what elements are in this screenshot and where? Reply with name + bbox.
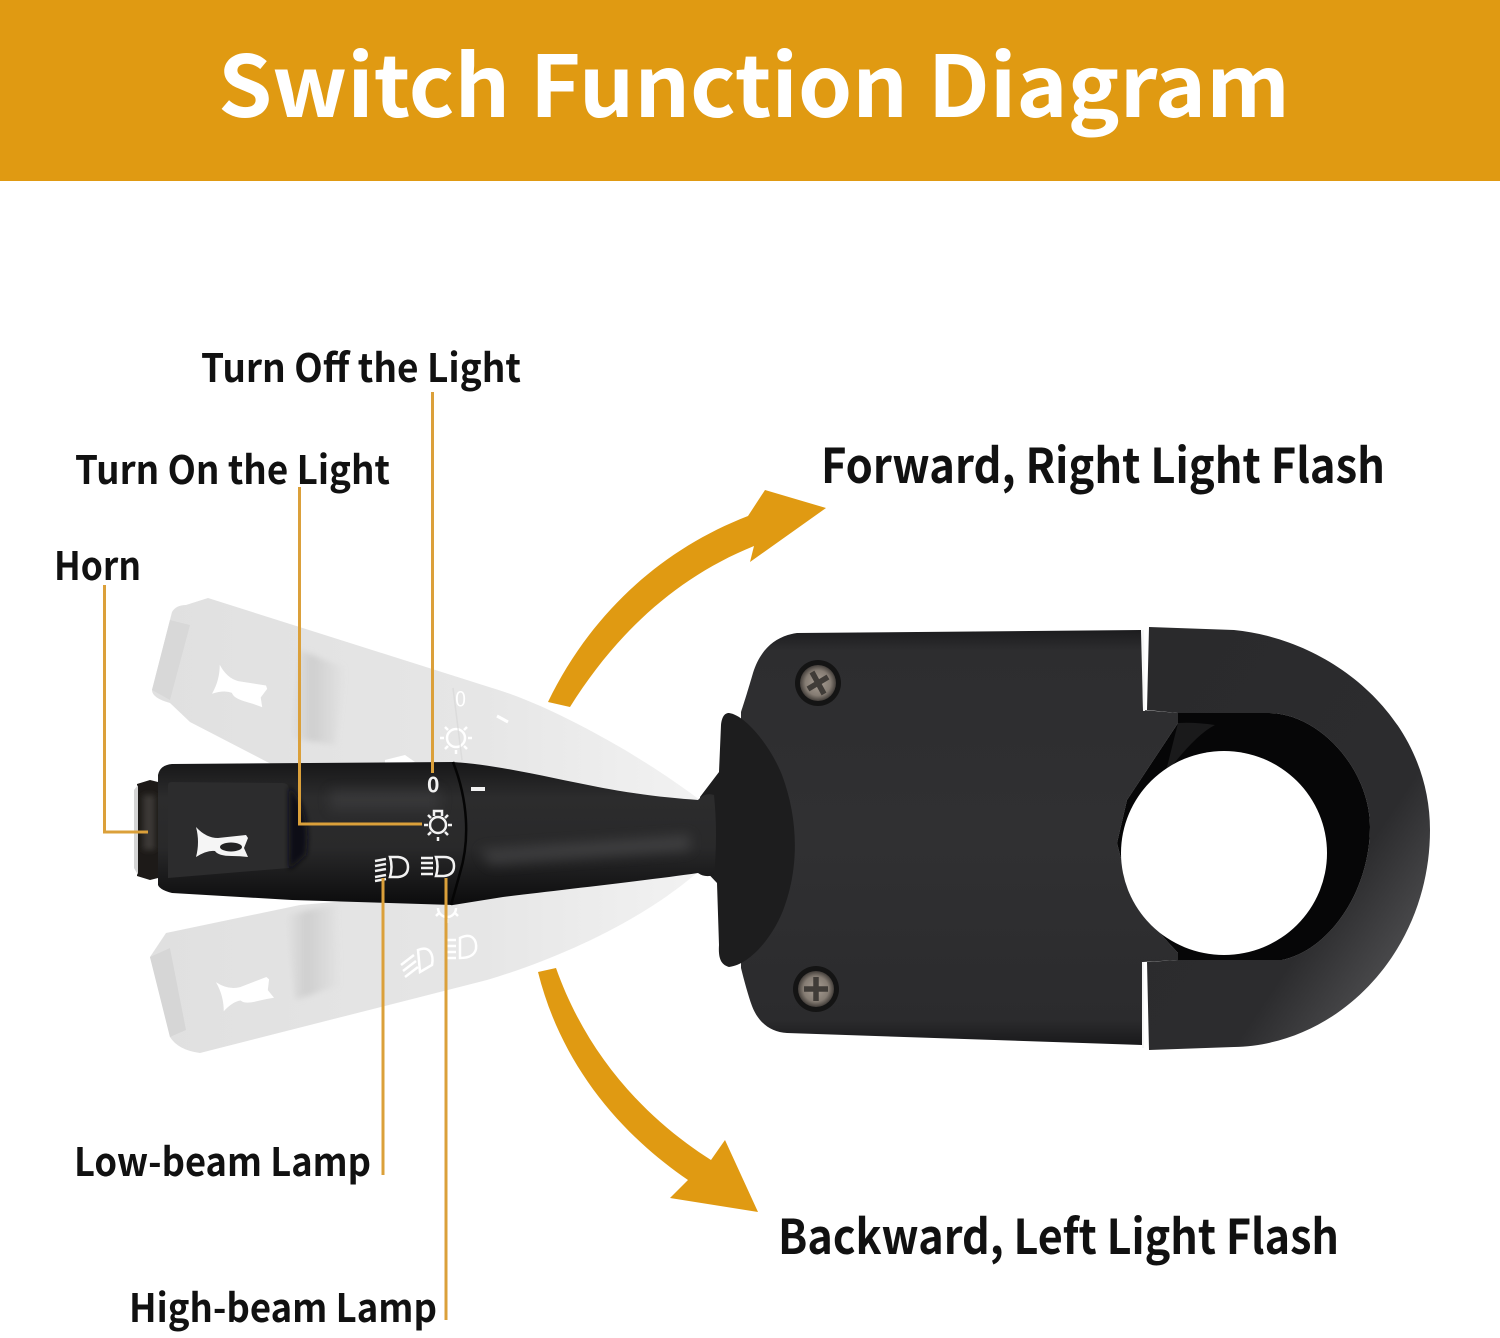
label: backward: Backward, Left Light Flash [778,1198,1339,1268]
band line [451,762,466,905]
icon: off mark: 0 [427,769,439,799]
icon: on mark [471,787,485,791]
stalk [158,762,716,905]
ghost lever: forward position [152,598,700,800]
surface highlights [480,835,690,865]
arrow: backward [538,968,758,1212]
boot [700,713,795,967]
clamp slit [1143,630,1144,1048]
label: turn on: Turn On the Light [75,440,390,496]
icon: light [424,811,452,841]
switch body [700,627,1430,1050]
label: turn off: Turn Off the Light [201,338,521,394]
leader: low beam [382,878,384,1175]
ghost lever: backward position [150,870,700,1053]
horn button [137,780,158,880]
title: Switch Function Diagram [218,19,1290,142]
label: high beam: High-beam Lamp [129,1278,437,1334]
ghost lever: forward position: 0 [455,683,466,712]
hole [1121,751,1327,955]
mounting plate [741,630,1178,1045]
label: forward: Forward, Right Light Flash [821,427,1385,497]
lever [134,762,716,905]
icon: high beam [421,857,454,876]
icon: horn [196,827,248,857]
screw: top [795,660,841,706]
leader lines [104,392,446,1320]
leader: horn [104,585,148,832]
leader: high beam [444,878,448,1320]
ghost horn icon [212,665,270,707]
label: horn: Horn [54,536,141,592]
icon: low beam [375,857,408,881]
screw: bottom [793,966,839,1012]
ghost horn icon [216,969,274,1011]
arrow: forward [548,490,826,707]
raised grip [168,782,289,878]
leader: turn on [300,487,422,824]
header banner [0,0,1500,181]
clamp inner shadow [1117,713,1370,960]
clamp inner ledge [1165,723,1215,775]
leader: turn off [431,392,434,773]
clamp loop [1147,627,1430,1050]
label: low beam: Low-beam Lamp [74,1132,371,1188]
